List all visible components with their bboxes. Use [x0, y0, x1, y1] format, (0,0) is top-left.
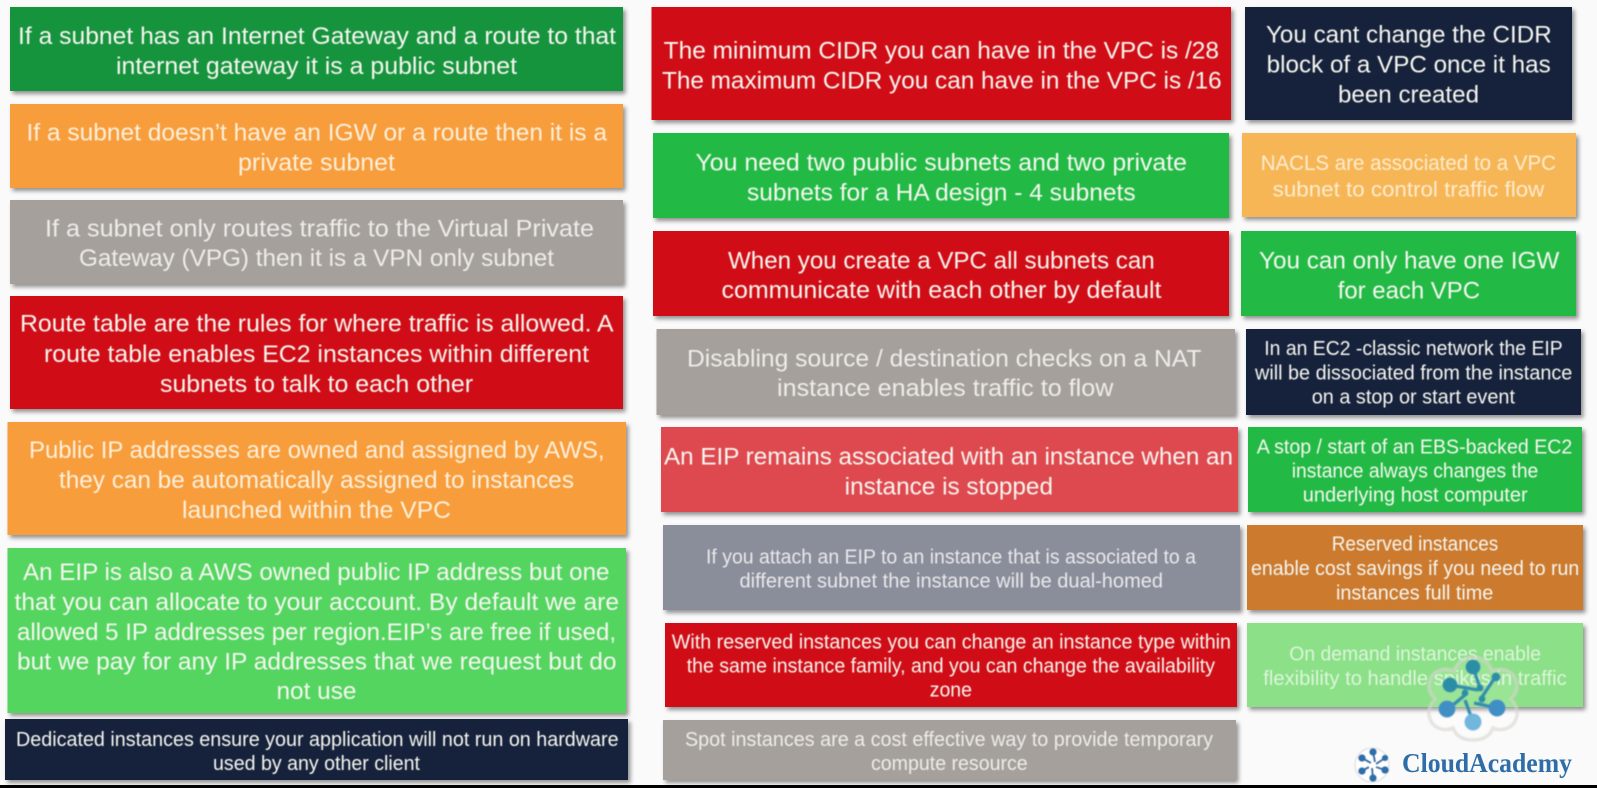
text: subnet communication: [722, 247, 1162, 304]
panel: VPN only subnet: [10, 200, 623, 284]
text: subnet communication: When you create a VPC all subnets can: [728, 247, 1155, 274]
text: CIDR block change: block of a VPC once it has: [1267, 52, 1551, 79]
text: public IP addresses: launched within the VPC: [182, 497, 451, 524]
text: NACLS: NACLS are associated to a VPC: [1261, 152, 1556, 175]
text: EBS-backed stop start: instance always changes the: [1292, 461, 1538, 483]
text: route table: Route table are the rules for where traffic is allowed. A: [20, 311, 614, 338]
text: EIP: but we pay for any IP addresses that we request but do: [17, 648, 616, 676]
panel: NACLS: [1242, 133, 1576, 217]
text: EIP: [14, 559, 619, 705]
text: EIP: allowed 5 IP addresses per region.EIP’s are free if used,: [17, 619, 616, 646]
text: EIP: An EIP is also a AWS owned public IP address but one: [23, 559, 610, 586]
text: private subnet: private subnet: [238, 150, 395, 177]
text: EBS-backed stop start: A stop / start of an EBS-backed EC2: [1257, 436, 1572, 458]
text: EIP remains associated: [664, 443, 1233, 500]
text: private subnet: [26, 120, 608, 177]
text: private subnet: If a subnet doesn’t have an IGW or a route then it is a: [26, 120, 608, 147]
text: public subnet: If a subnet has an Internet Gateway and a route to that: [18, 23, 616, 50]
icon: watermark network: [1429, 657, 1517, 740]
text: reserved instances cost: enable cost savings if you need to run: [1251, 558, 1579, 580]
panel: HA design: [653, 133, 1229, 218]
icon: logo network: [1355, 748, 1389, 782]
panel: route table: [10, 296, 623, 409]
panel: dedicated instances: [5, 719, 628, 780]
text: EIP remains associated: An EIP remains associated with an instance when an: [664, 443, 1233, 470]
text: spot instances: Spot instances are a cost effective way to provide temporary: [685, 729, 1213, 751]
panel: subnet communication: [653, 231, 1229, 316]
text: dedicated instances: used by any other client: [213, 753, 420, 775]
text: source destination checks: instance enables traffic to flow: [777, 375, 1114, 402]
text: reserved instances cost: Reserved instances: [1332, 534, 1498, 556]
text: CIDR limits: The maximum CIDR you can have in the VPC is /16: [662, 67, 1222, 94]
text: VPN only subnet: Gateway (VPG) then it is a VPN only subnet: [79, 245, 554, 272]
text: EC2-classic EIP: [1254, 338, 1572, 409]
text: reserved instances cost: [1251, 534, 1579, 604]
panel: source destination checks: [656, 329, 1235, 415]
text: EBS-backed stop start: [1257, 436, 1572, 507]
text: CIDR block change: [1266, 22, 1552, 109]
text: dual-homed: different subnet the instance will be dual-homed: [740, 571, 1163, 593]
text: CIDR block change: been created: [1338, 82, 1479, 109]
text: dual-homed: If you attach an EIP to an instance that is associated to a: [706, 546, 1197, 568]
text: public subnet: internet gateway it is a public subnet: [116, 53, 517, 80]
text: CIDR block change: You cant change the CIDR: [1266, 22, 1552, 49]
text: dedicated instances: Dedicated instances ensure your application will not run on hardware: [16, 729, 619, 751]
panel: EC2-classic EIP: [1246, 329, 1581, 415]
text: subnet communication: communicate with each other by default: [722, 277, 1162, 304]
text: route table: route table enables EC2 instances within different: [44, 341, 589, 368]
text: EIP: that you can allocate to your account. By default we are: [14, 589, 619, 616]
text: VPN only subnet: If a subnet only routes traffic to the Virtual Private: [45, 216, 594, 243]
text: public subnet: [18, 23, 616, 80]
text: spot instances: [685, 729, 1213, 775]
text: route table: subnets to talk to each other: [160, 371, 473, 398]
panel: public IP addresses: [8, 422, 626, 535]
panel: reserved instances cost: [1247, 525, 1583, 610]
panel: private subnet: [10, 104, 623, 188]
text: dual-homed: [706, 546, 1197, 593]
panel: reserved instance changes: [665, 623, 1237, 707]
text: spot instances: compute resource: [871, 753, 1028, 775]
text: EIP remains associated: instance is stopped: [845, 473, 1053, 500]
text: NACLS: subnet to control traffic flow: [1273, 179, 1545, 202]
text: public IP addresses: [29, 437, 604, 524]
logo: CloudAcademy: [1355, 748, 1572, 782]
panel: dual-homed: [663, 525, 1240, 610]
text: public IP addresses: they can be automatically assigned to instances: [59, 467, 574, 494]
panel: EBS-backed stop start: [1248, 427, 1582, 512]
text: CIDR limits: [662, 37, 1222, 94]
text: reserved instance changes: zone: [930, 680, 972, 702]
panel: on demand instances: [1247, 623, 1583, 707]
text: EC2-classic EIP: will be dissociated from the instance: [1254, 362, 1572, 384]
text: on demand instances: On demand instances enable: [1289, 644, 1541, 666]
panel: CIDR block change: [1245, 7, 1572, 120]
text: HA design: You need two public subnets and two private: [696, 150, 1187, 177]
text: EC2-classic EIP: In an EC2 -classic network the EIP: [1264, 338, 1563, 360]
text: one IGW: for each VPC: [1338, 277, 1480, 304]
text: NACLS: [1261, 152, 1556, 202]
panel: CIDR limits: [652, 7, 1231, 120]
text: source destination checks: Disabling source / destination checks on a NAT: [687, 346, 1202, 373]
text: logo wordmark: CloudAcademy: [1402, 748, 1572, 778]
text: route table: [20, 311, 614, 398]
panel: public subnet: [10, 7, 623, 91]
text: HA design: [696, 150, 1187, 207]
panel: EIP remains associated: [661, 427, 1238, 512]
text: one IGW: You can only have one IGW: [1259, 247, 1560, 274]
panel: spot instances: [663, 720, 1236, 780]
text: on demand instances: [1263, 644, 1567, 690]
text: reserved instance changes: With reserved instances you can change an instance type within: [672, 631, 1231, 653]
text: EBS-backed stop start: underlying host computer: [1303, 485, 1528, 507]
text: on demand instances: flexibility to handle spikes in traffic: [1263, 668, 1567, 690]
text: HA design: subnets for a HA design - 4 subnets: [747, 180, 1136, 207]
text: one IGW: [1259, 247, 1560, 304]
text: reserved instance changes: [672, 631, 1231, 702]
text: public IP addresses: Public IP addresses are owned and assigned by AWS,: [29, 437, 604, 464]
panel: EIP: [8, 548, 626, 713]
text: reserved instances cost: instances full time: [1336, 582, 1493, 604]
text: EIP: not use: [276, 678, 356, 705]
text: dedicated instances: [16, 729, 619, 775]
text: VPN only subnet: [45, 216, 594, 272]
text: CIDR limits: The minimum CIDR you can have in the VPC is /28: [664, 37, 1219, 64]
text: EC2-classic EIP: on a stop or start event: [1312, 387, 1515, 409]
text: reserved instance changes: the same instance family, and you can change the availability: [687, 656, 1215, 678]
text: source destination checks: [687, 346, 1202, 402]
panel: one IGW: [1241, 231, 1576, 316]
